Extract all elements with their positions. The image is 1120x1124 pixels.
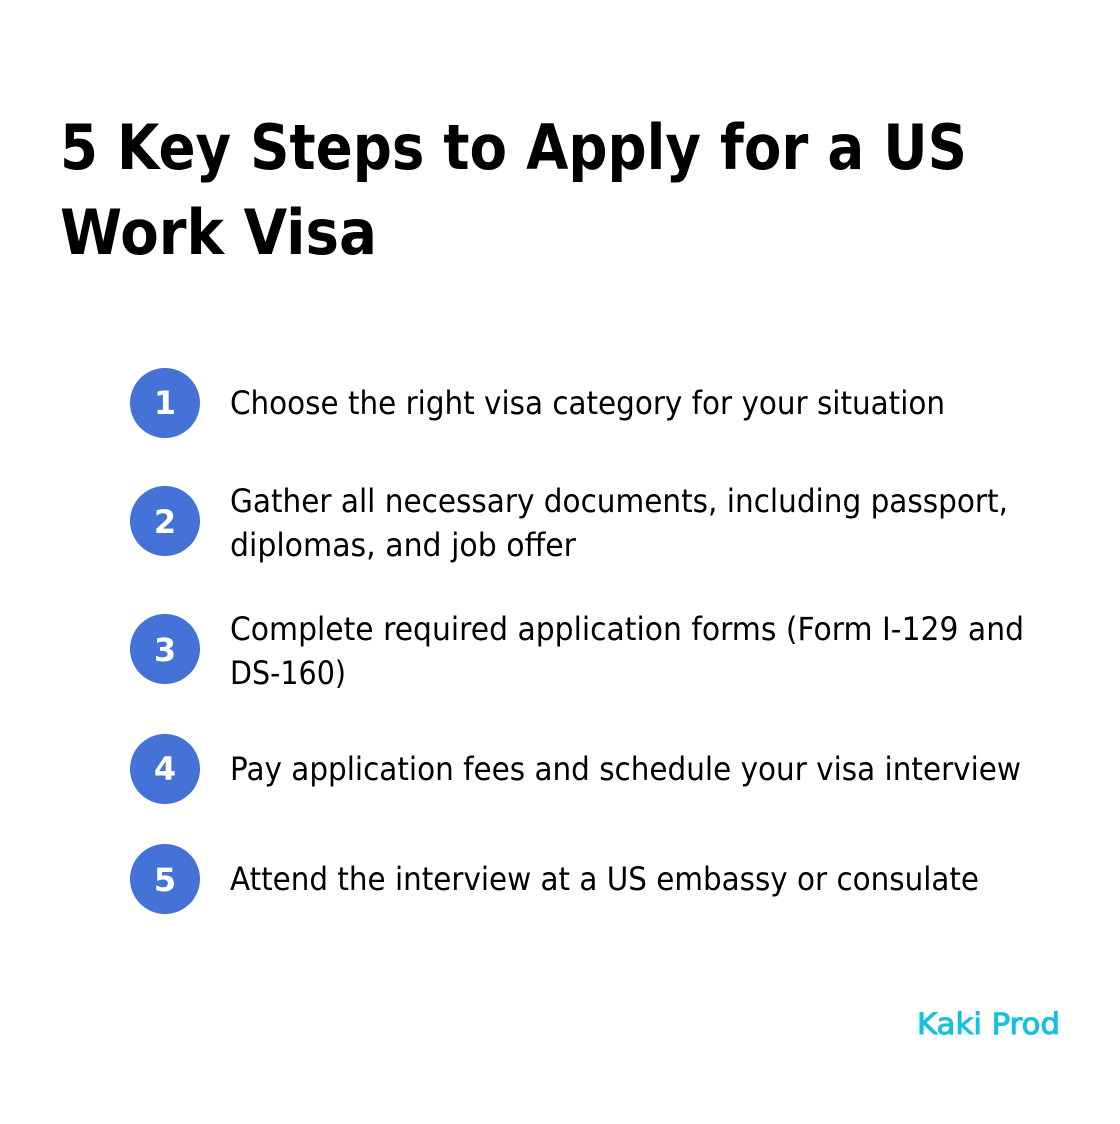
number badge 3 bbox=[130, 614, 200, 684]
step 5 bbox=[130, 844, 979, 914]
logo: Kaki Prod: Kaki Prod bbox=[917, 1007, 1060, 1041]
number badge 2: 2 bbox=[154, 503, 176, 541]
step 2 text: Gather all necessary documents, including passport, bbox=[230, 482, 1008, 520]
step 5 text: Attend the interview at a US embassy or consulate bbox=[230, 860, 979, 898]
step 2 text bbox=[230, 482, 1008, 564]
step 2 bbox=[130, 482, 1008, 564]
number badge 4: 4 bbox=[154, 750, 176, 788]
step 4 text: Pay application fees and schedule your visa interview bbox=[230, 750, 1021, 788]
step 4 bbox=[130, 734, 1021, 804]
step 1 text: Choose the right visa category for your situation bbox=[230, 384, 945, 422]
step 3 text: DS-160) bbox=[230, 654, 346, 692]
number badge 4 bbox=[130, 734, 200, 804]
number badge 5 bbox=[130, 844, 200, 914]
step 3 text bbox=[230, 610, 1024, 692]
number badge 1: 1 bbox=[154, 384, 176, 422]
number badge 5: 5 bbox=[154, 861, 176, 899]
title: Work Visa bbox=[60, 196, 377, 269]
number badge 2 bbox=[130, 486, 200, 556]
number badge 3: 3 bbox=[154, 631, 176, 669]
step 1 bbox=[130, 368, 945, 438]
title: 5 Key Steps to Apply for a US bbox=[60, 111, 967, 184]
step 3 bbox=[130, 610, 1024, 692]
step 2 text: diplomas, and job offer bbox=[230, 526, 577, 564]
number badge 1 bbox=[130, 368, 200, 438]
title bbox=[60, 111, 967, 269]
step 3 text: Complete required application forms (Form I-129 and bbox=[230, 610, 1024, 648]
